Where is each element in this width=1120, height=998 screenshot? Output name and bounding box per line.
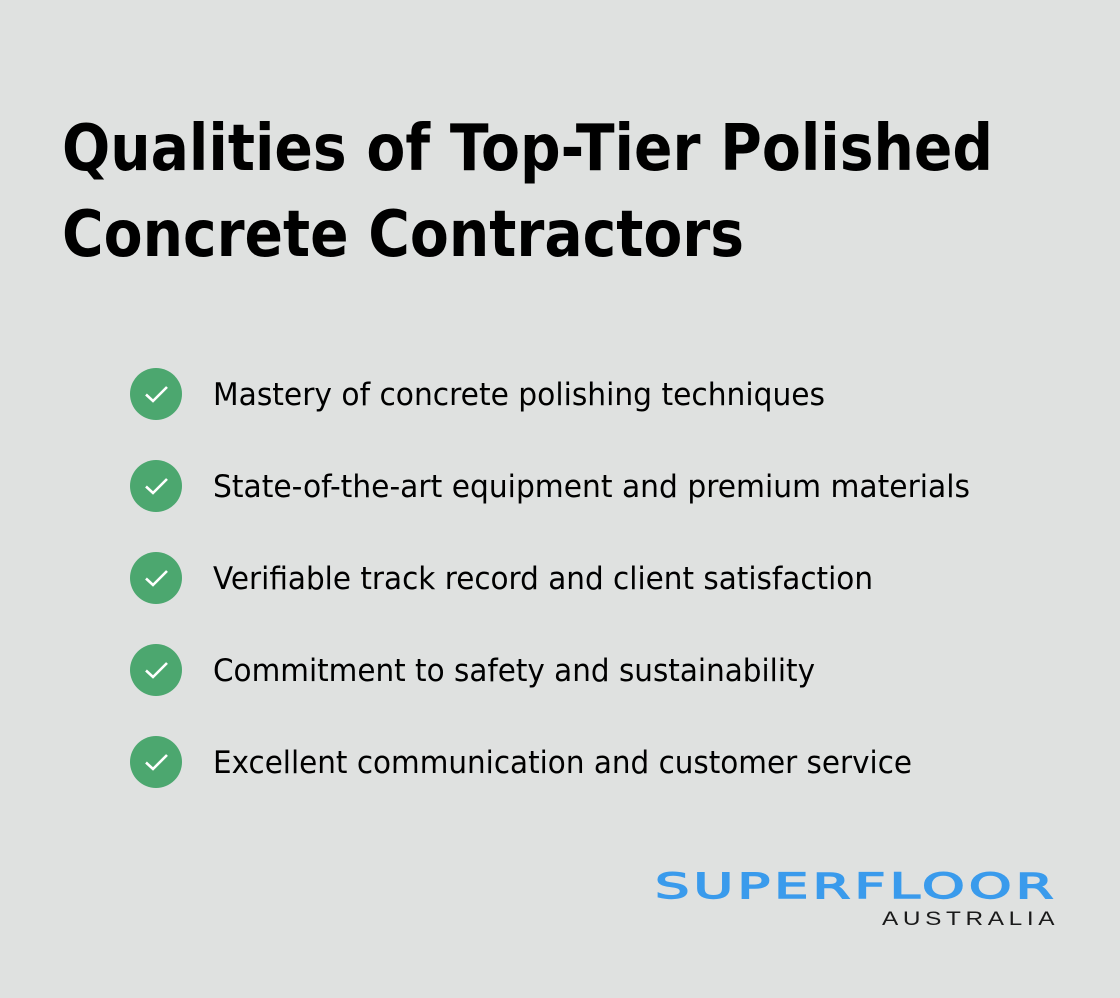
title [62,112,993,272]
logo: Superfloor Australia [655,866,1055,929]
item: track record: Verifiable track record and client satisfaction [213,561,873,597]
title: Qualities of Top-Tier Polished [62,112,993,186]
item: communication: Excellent communication and customer service [213,745,912,781]
item: mastery [130,368,825,420]
item: equipment [130,460,970,512]
item: communication [130,736,912,788]
item: safety: Commitment to safety and sustainability [213,653,815,689]
logo: Superfloor Australia: AUSTRALIA [882,907,1055,929]
logo: Superfloor Australia: SUPERFLOOR [655,866,1053,906]
item: track record [130,552,873,604]
title: Concrete Contractors [62,198,744,272]
item: mastery: Mastery of concrete polishing techniques [213,377,825,413]
item: safety [130,644,815,696]
checklist [130,368,970,788]
item: equipment: State-of-the-art equipment and premium materials [213,469,970,505]
